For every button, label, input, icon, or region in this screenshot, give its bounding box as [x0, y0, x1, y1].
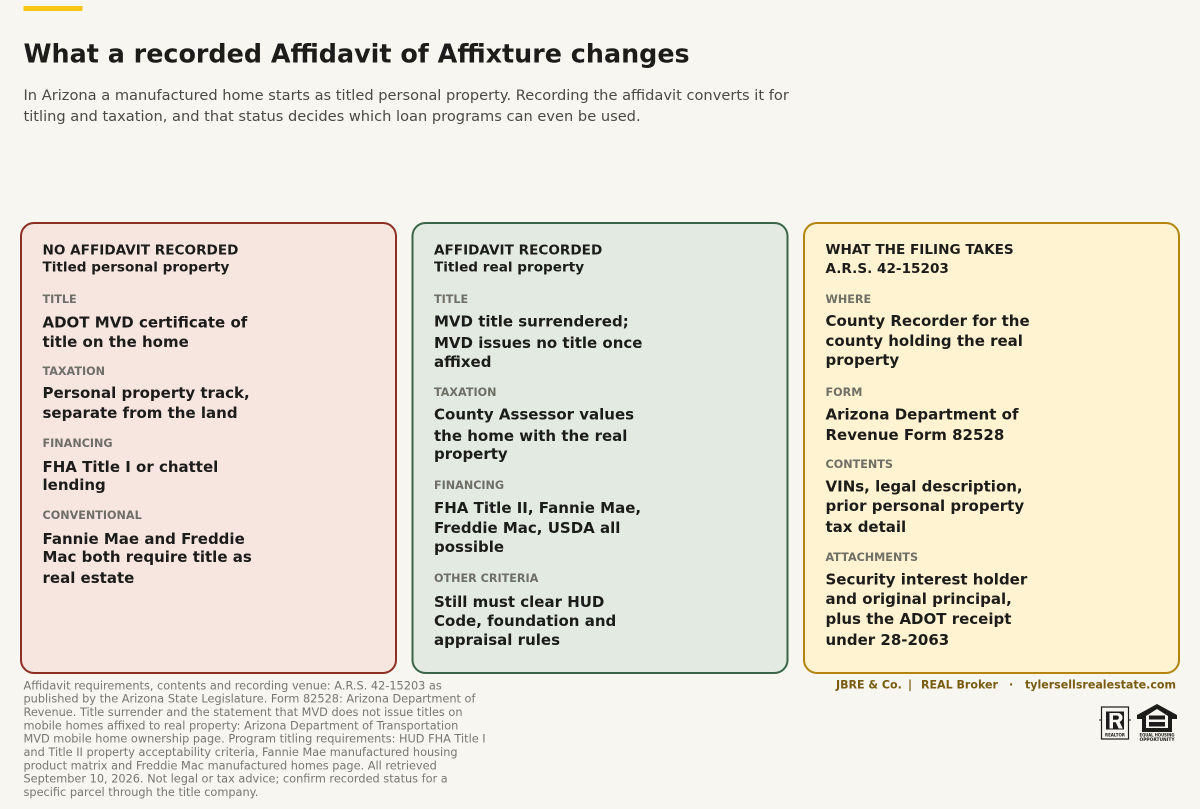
- sources footnote: September 10, 2026. Not legal or tax advice; confirm recorded status for a: [24, 772, 448, 786]
- row: other criteria: Code, foundation and: [434, 612, 616, 630]
- row: conventional: real estate: [42, 569, 134, 587]
- row: where: property: [826, 351, 899, 369]
- row: other criteria: [434, 572, 616, 649]
- row: taxation: County Assessor values: [434, 406, 634, 424]
- panel: what the filing takes: [804, 223, 1179, 673]
- row: title: MVD title surrendered;: [434, 312, 629, 330]
- row: attachments: and original principal,: [826, 590, 1012, 608]
- sources footnote: [24, 678, 486, 799]
- row: contents: [826, 458, 1024, 536]
- sources footnote: and Title II property acceptability criteria, Fannie Mae manufactured housing: [24, 745, 458, 759]
- row: title: [434, 293, 642, 371]
- row: taxation: separate from the land: [42, 404, 238, 422]
- sources footnote: Affidavit requirements, contents and recording venue: A.R.S. 42-15203 as: [24, 678, 442, 692]
- row: title: [42, 293, 248, 351]
- row: financing: FINANCING: [434, 479, 504, 492]
- icon: equal housing opportunity logo: EQUAL HOUSING: [1140, 732, 1175, 738]
- row: form: [826, 386, 1019, 444]
- panel heading: [42, 242, 238, 276]
- row: title: TITLE: [42, 293, 77, 306]
- sources footnote: MVD mobile home ownership page. Program titling requirements: HUD FHA Title I: [24, 732, 486, 746]
- row: attachments: [826, 551, 1028, 649]
- panel heading: AFFIDAVIT RECORDED: [434, 242, 602, 258]
- row: conventional: CONVENTIONAL: [42, 509, 142, 522]
- row: attachments: Security interest holder: [826, 570, 1028, 588]
- panel heading: Titled personal property: [42, 260, 230, 276]
- row: financing: lending: [42, 476, 106, 494]
- row: title: ADOT MVD certificate of: [42, 314, 248, 332]
- row: form: Arizona Department of: [826, 406, 1019, 424]
- row: contents: prior personal property: [826, 497, 1024, 515]
- row: financing: FHA Title I or chattel: [42, 458, 218, 476]
- row: financing: [434, 479, 641, 556]
- panel heading: Titled real property: [434, 260, 584, 276]
- row: financing: FHA Title II, Fannie Mae,: [434, 499, 641, 517]
- row: taxation: Personal property track,: [42, 384, 250, 402]
- row: title: TITLE: [434, 293, 468, 306]
- brand line: |: [908, 678, 912, 692]
- row: attachments: under 28-2063: [826, 631, 949, 649]
- row: contents: CONTENTS: [826, 458, 893, 471]
- sources footnote: mobile homes affixed to real property: Arizona Department of Transportation: [24, 718, 458, 732]
- title: What a recorded Affidavit of Affixture changes: [24, 38, 690, 68]
- row: other criteria: appraisal rules: [434, 631, 560, 649]
- brand line: JBRE & Co.: [835, 678, 902, 692]
- row: financing: Freddie Mac, USDA all: [434, 519, 620, 537]
- row: contents: VINs, legal description,: [826, 478, 1023, 496]
- row: where: [826, 293, 1030, 369]
- row: conventional: Fannie Mae and Freddie: [42, 530, 245, 548]
- row: taxation: TAXATION: [42, 365, 105, 378]
- row: title: affixed: [434, 353, 491, 371]
- row: attachments: plus the ADOT receipt: [826, 610, 1011, 628]
- row: where: county holding the real: [826, 332, 1023, 350]
- panel: no affidavit recorded: [21, 223, 396, 673]
- row: financing: FINANCING: [42, 437, 113, 450]
- row: taxation: [434, 386, 634, 463]
- row: where: County Recorder for the: [826, 312, 1030, 330]
- row: form: FORM: [826, 386, 862, 399]
- panel: affidavit recorded: [412, 223, 788, 673]
- sources footnote: product matrix and Freddie Mac manufactured homes page. All retrieved: [24, 758, 437, 772]
- panel heading: [826, 242, 1014, 277]
- row: taxation: [42, 365, 250, 422]
- brand line: tylersellsrealestate.com: [1025, 678, 1176, 692]
- subtitle: [24, 87, 789, 125]
- sources footnote: specific parcel through the title company.: [24, 785, 258, 799]
- icon: realtor logo: [1099, 707, 1131, 739]
- brand line: [835, 678, 1176, 692]
- row: title: title on the home: [42, 333, 189, 351]
- row: taxation: TAXATION: [434, 386, 497, 399]
- row: where: WHERE: [826, 293, 871, 306]
- panel heading: WHAT THE FILING TAKES: [826, 242, 1014, 258]
- icon: realtor logo: REALTOR: [1105, 732, 1125, 738]
- row: conventional: [42, 509, 252, 587]
- sources footnote: published by the Arizona State Legislature. Form 82528: Arizona Department of: [24, 692, 476, 706]
- subtitle: titling and taxation, and that status decides which loan programs can even be used.: [24, 108, 641, 125]
- row: financing: [42, 437, 218, 494]
- icon: equal housing opportunity logo: [1137, 704, 1177, 743]
- row: attachments: ATTACHMENTS: [826, 551, 918, 564]
- icon: equal housing opportunity logo: OPPORTUNITY: [1140, 737, 1175, 743]
- brand line: REAL Broker: [921, 678, 998, 692]
- row: conventional: Mac both require title as: [42, 548, 252, 566]
- accent bar: [24, 6, 82, 11]
- row: financing: possible: [434, 538, 504, 556]
- row: title: MVD issues no title once: [434, 334, 642, 352]
- panel heading: A.R.S. 42-15203: [826, 261, 949, 277]
- row: other criteria: Still must clear HUD: [434, 593, 604, 611]
- row: form: Revenue Form 82528: [826, 426, 1004, 444]
- row: taxation: property: [434, 445, 508, 463]
- row: contents: tax detail: [826, 518, 906, 536]
- panel heading: [434, 242, 602, 276]
- subtitle: In Arizona a manufactured home starts as titled personal property. Recording the affidavit converts it for: [24, 87, 789, 104]
- sources footnote: Revenue. Title surrender and the statement that MVD does not issue titles on: [24, 705, 463, 719]
- brand line: ·: [1009, 678, 1013, 692]
- panel heading: NO AFFIDAVIT RECORDED: [42, 242, 238, 258]
- row: other criteria: OTHER CRITERIA: [434, 572, 539, 585]
- row: taxation: the home with the real: [434, 427, 627, 445]
